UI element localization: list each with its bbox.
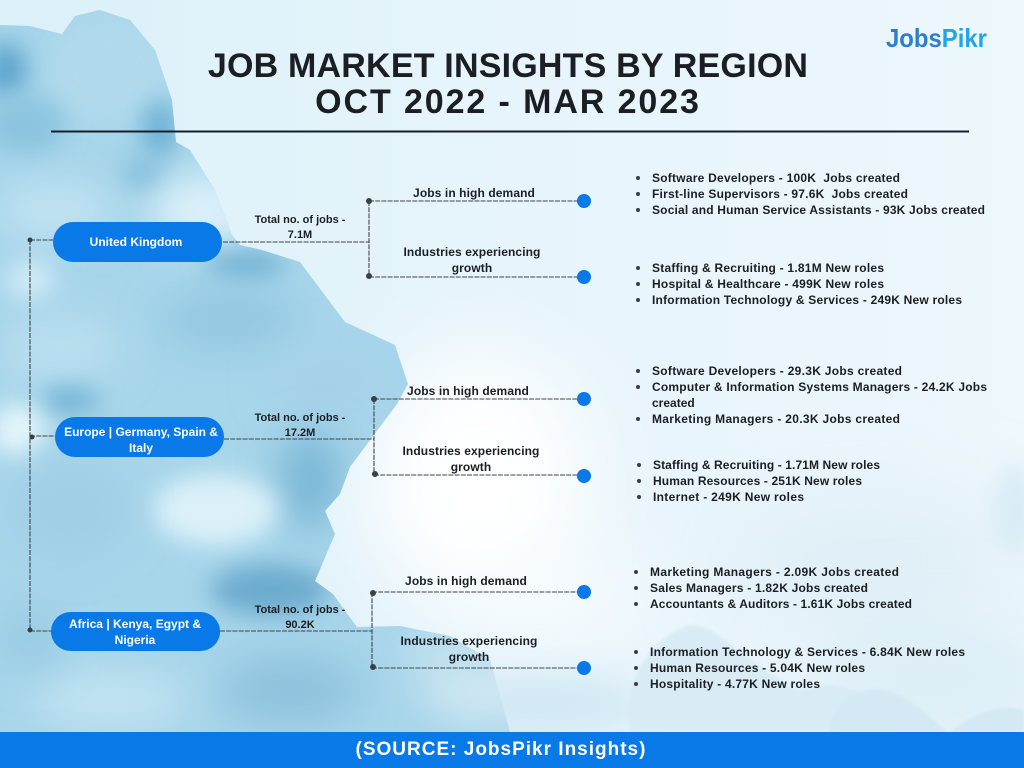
- panel: Africa: [51, 565, 965, 691]
- title divider: [51, 130, 969, 132]
- title: JOB MARKET INSIGHTS BY REGION: [208, 47, 808, 85]
- list: UK jobs: Software Developers - 100K Jobs created: [652, 171, 900, 185]
- panel: Europe: [55, 364, 987, 504]
- list: Europe industries: [637, 458, 880, 504]
- list: Africa industries: Human Resources - 5.04K New roles: [650, 661, 865, 675]
- list: Europe jobs: [636, 364, 987, 426]
- total jobs: United Kingdom: 7.1M: [288, 229, 312, 241]
- node: United Kingdom: [53, 222, 222, 262]
- list: UK industries: Hospital & Healthcare - 499K New roles: [652, 277, 884, 291]
- list: Africa jobs: Accountants & Auditors - 1.61K Jobs created: [650, 597, 912, 611]
- list: Africa industries: Hospitality - 4.77K New roles: [650, 677, 820, 691]
- heading: jobs in high demand: Jobs in high demand: [405, 574, 527, 588]
- footer: source: [0, 732, 1024, 768]
- heading: jobs in high demand: Jobs in high demand: [407, 384, 529, 398]
- footer: source: (SOURCE: JobsPikr Insights): [356, 739, 646, 760]
- total jobs: Africa: Total no. of jobs -: [255, 604, 345, 616]
- list: Africa jobs: Sales Managers - 1.82K Jobs created: [650, 581, 868, 595]
- list: UK industries: Information Technology & Services - 249K New roles: [652, 293, 962, 307]
- heading: industries experiencing growth: Industries experiencing: [400, 634, 538, 648]
- node: Europe: Italy: [129, 441, 153, 455]
- list: UK jobs: [636, 171, 985, 217]
- node: Africa: [51, 612, 220, 651]
- heading: industries experiencing growth: growth: [452, 261, 492, 275]
- node: Africa: Africa | Kenya, Egypt &: [69, 617, 201, 631]
- node: Europe: [55, 417, 224, 457]
- total jobs: Europe: Total no. of jobs -: [255, 412, 345, 424]
- panel: United Kingdom: [53, 171, 985, 307]
- list: Africa industries: [634, 645, 965, 691]
- list: UK jobs: Social and Human Service Assistants - 93K Jobs created: [652, 203, 985, 217]
- total jobs: Europe: 17.2M: [285, 427, 315, 439]
- heading: jobs in high demand: Jobs in high demand: [413, 186, 535, 200]
- list: UK industries: [636, 261, 962, 307]
- main wash shape: [0, 10, 510, 732]
- list: Europe jobs: created: [652, 396, 695, 410]
- list: Africa jobs: [634, 565, 912, 611]
- node: Europe: Europe | Germany, Spain &: [64, 425, 218, 439]
- connector: Europe: [224, 392, 591, 483]
- heading: industries experiencing growth: Industries experiencing: [402, 444, 540, 458]
- heading: industries experiencing growth: growth: [451, 460, 491, 474]
- list: Europe jobs: Computer & Information Systems Managers - 24.2K Jobs: [652, 380, 987, 394]
- list: Europe industries: Human Resources - 251K New roles: [653, 474, 862, 488]
- title: [208, 47, 808, 121]
- heading: industries experiencing growth: Industries experiencing: [403, 245, 541, 259]
- list: Europe jobs: Marketing Managers - 20.3K Jobs created: [652, 412, 900, 426]
- title: OCT 2022 - MAR 2023: [315, 83, 701, 121]
- list: Europe jobs: Software Developers - 29.3K Jobs created: [652, 364, 902, 378]
- list: Europe industries: Internet - 249K New roles: [653, 490, 804, 504]
- connector: Africa: [220, 585, 591, 675]
- node: Africa: Nigeria: [115, 633, 156, 647]
- list: UK jobs: First-line Supervisors - 97.6K Jobs created: [652, 187, 908, 201]
- node: United Kingdom: United Kingdom: [90, 235, 182, 249]
- connector: United Kingdom: [223, 194, 591, 284]
- list: UK industries: Staffing & Recruiting - 1.81M New roles: [652, 261, 884, 275]
- total jobs: United Kingdom: Total no. of jobs -: [255, 214, 345, 226]
- list: Africa industries: Information Technology & Services - 6.84K New roles: [650, 645, 965, 659]
- left connector spine: [28, 238, 55, 632]
- list: Europe industries: Staffing & Recruiting - 1.71M New roles: [653, 458, 880, 472]
- logo: JobsPikr: JobsPikr: [886, 23, 987, 53]
- list: Africa jobs: Marketing Managers - 2.09K Jobs created: [650, 565, 899, 579]
- heading: industries experiencing growth: growth: [449, 650, 489, 664]
- total jobs: Africa: 90.2K: [285, 619, 315, 631]
